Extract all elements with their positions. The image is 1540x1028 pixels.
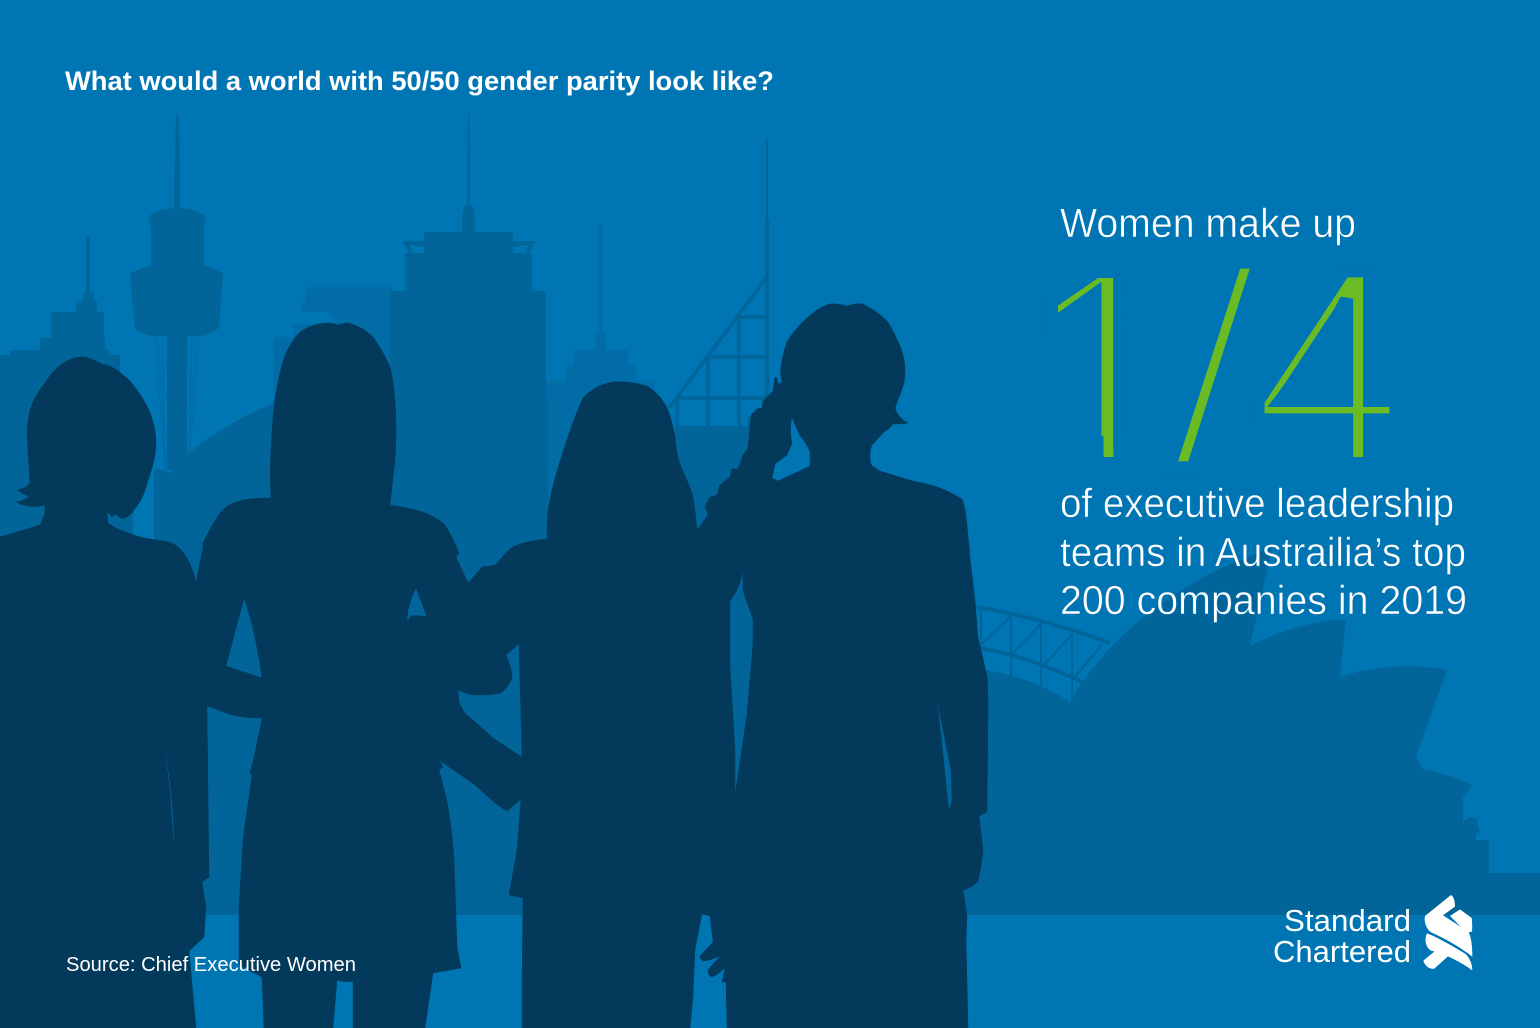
intro text: Women make up: Women make up xyxy=(1060,200,1356,246)
icon: Standard Chartered logo xyxy=(1423,895,1472,970)
big statistic: 1/4: 4 xyxy=(1252,210,1404,523)
skyline: left tower block xyxy=(0,237,133,560)
source note: Source: Chief Executive Women xyxy=(66,954,356,976)
big statistic: 1/4 xyxy=(1058,268,1390,462)
big statistic: 1/4: / xyxy=(1168,212,1261,524)
Standard Chartered wordmark xyxy=(1273,903,1411,969)
body text: executive leadership xyxy=(1060,480,1467,623)
skyline: central skyscraper xyxy=(390,112,546,560)
body text: executive leadership: of executive leadership xyxy=(1060,480,1454,526)
skyline: lighter rear buildings xyxy=(273,224,654,545)
Standard Chartered wordmark: Standard xyxy=(1284,903,1411,938)
four women silhouettes xyxy=(0,304,988,1028)
body text: executive leadership: 200 companies in 2019 xyxy=(1060,577,1467,623)
Standard Chartered wordmark: Chartered xyxy=(1273,934,1411,969)
harbour bridge xyxy=(976,607,1110,702)
big statistic: 1/4: 1 xyxy=(1024,212,1180,524)
skyline: crane-like bridge tower frame xyxy=(669,138,767,426)
Sydney Opera House xyxy=(970,548,1540,915)
skyline: base and left opera sail xyxy=(0,402,970,915)
skyline: Sydney Tower xyxy=(130,116,223,470)
body text: executive leadership: teams in Austrailia’s top xyxy=(1060,529,1466,575)
title: What would a world with 50/50 gender parity look like? xyxy=(65,66,774,96)
